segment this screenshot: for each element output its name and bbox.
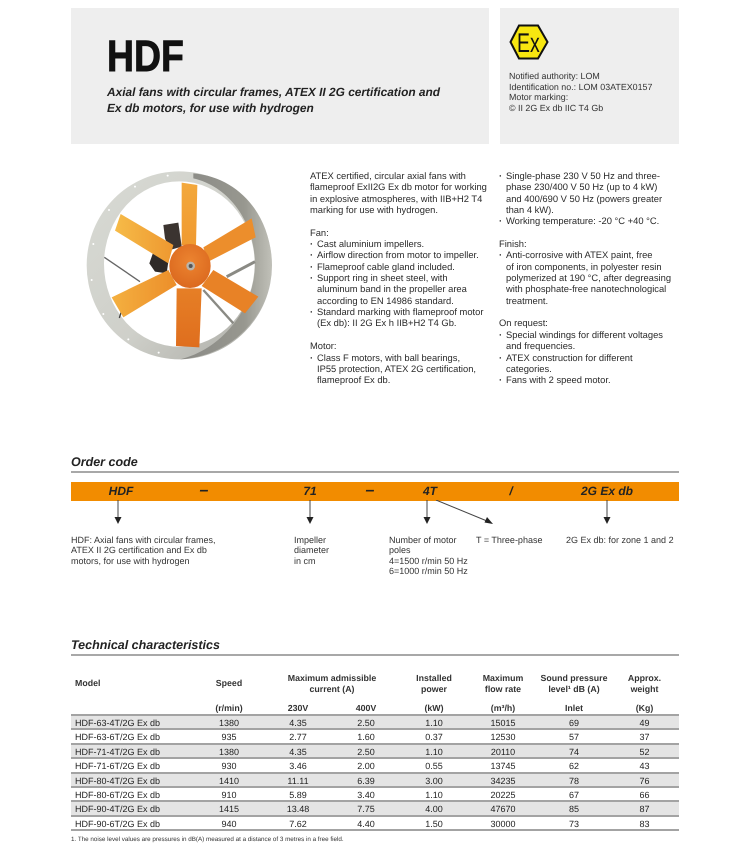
order code note: HDF — [71, 535, 216, 566]
technical characteristics table: 7.75 — [357, 804, 375, 814]
technical characteristics table: 30000 — [490, 819, 516, 829]
order code note: motor poles — [389, 535, 468, 576]
technical characteristics table: Model — [75, 678, 100, 688]
technical characteristics table: Approx. — [628, 673, 661, 683]
heading: Order code: Order code — [71, 455, 138, 469]
technical characteristics table: 4.00 — [425, 804, 443, 814]
description column 1: (Ex db): II 2G Ex h IIB+H2 T4 Gb. — [317, 318, 456, 328]
technical characteristics table: 1.10 — [425, 747, 443, 757]
technical characteristics table — [71, 673, 679, 831]
heading: Technical characteristics: Technical characteristics — [71, 638, 220, 652]
description column 2: Fans with 2 speed motor. — [506, 375, 611, 385]
technical characteristics table: 5.89 — [289, 790, 307, 800]
order code note: HDF: motors, for use with hydrogen — [71, 556, 190, 566]
motor and struts — [104, 223, 255, 323]
subtitle — [106, 85, 440, 114]
description column 1: flameproof Ex db. — [317, 375, 390, 385]
technical characteristics table: 47670 — [490, 804, 516, 814]
technical characteristics table: 85 — [569, 804, 579, 814]
description column 1: in explosive atmospheres, with IIB+H2 T4 — [310, 194, 482, 204]
order code note: HDF: ATEX II 2G certification and Ex db — [71, 545, 207, 555]
technical characteristics table: (r/min) — [215, 702, 243, 712]
technical characteristics table: 49 — [639, 718, 650, 728]
description column 1: IP55 protection, ATEX 2G certification, — [317, 364, 476, 374]
description column 1: Flameproof cable gland included. — [317, 262, 455, 272]
technical characteristics table: 15015 — [490, 718, 516, 728]
technical characteristics table: 2.50 — [357, 747, 375, 757]
description column 2: categories. — [506, 364, 552, 374]
description column 1: Fan: — [310, 228, 329, 238]
technical characteristics table: 0.55 — [425, 761, 443, 771]
technical characteristics table: 3.40 — [357, 790, 375, 800]
description column 1: Standard marking with flameproof motor — [317, 307, 483, 317]
technical characteristics table: 400V — [356, 702, 376, 712]
product photo: axial fan — [86, 171, 272, 360]
code segment: dash: – — [200, 482, 208, 499]
order code note: motor poles: poles — [389, 545, 411, 555]
technical characteristics table: 3.46 — [289, 761, 307, 771]
technical characteristics table: 3.00 — [425, 776, 443, 786]
certification text: Notified authority: LOM — [509, 71, 600, 81]
technical characteristics table: 52 — [639, 747, 650, 757]
technical characteristics table: 910 — [221, 790, 237, 800]
technical characteristics table: 1380 — [219, 718, 239, 728]
description column 2: polymerized at 190 °C, after degreasing — [506, 273, 671, 283]
order code note: motor poles: 4=1500 r/min 50 Hz — [389, 556, 468, 566]
description column 1: aluminum band in the propeller area — [317, 284, 467, 294]
technical characteristics table: 69 — [569, 718, 579, 728]
technical characteristics table: 76 — [639, 776, 650, 786]
technical characteristics table: 13.48 — [287, 804, 309, 814]
technical characteristics table: 4.40 — [357, 819, 375, 829]
description column 2: with phosphate-free nanotechnological — [506, 284, 666, 294]
technical characteristics table: 1.10 — [425, 790, 443, 800]
description column 1: flameproof ExII2G Ex db motor for working — [310, 182, 487, 192]
technical characteristics table: 13745 — [490, 761, 516, 771]
order code note: three-phase: T = Three-phase — [476, 535, 542, 545]
description column 1: Support ring in sheet steel, with — [317, 273, 448, 283]
technical characteristics table: Sound pressure — [540, 673, 607, 683]
code segment: slash: / — [509, 484, 513, 498]
header panel: title — [71, 8, 489, 144]
subtitle: Axial fans with circular frames, ATEX II 2G certification and — [107, 85, 440, 99]
technical characteristics table: 1415 — [219, 804, 239, 814]
technical characteristics table: Maximum — [483, 673, 523, 683]
certification text: Motor marking: — [509, 92, 568, 102]
icon: Ex hexagon: Ex — [517, 28, 540, 58]
order code note: motor poles: Number of motor — [389, 535, 457, 545]
description column 1: Motor: — [310, 341, 337, 351]
technical characteristics table: Speed — [216, 678, 242, 688]
technical characteristics table: 935 — [221, 732, 237, 742]
technical characteristics table: Maximum admissible — [288, 673, 376, 683]
fan ring — [87, 171, 272, 359]
technical characteristics table: 78 — [569, 776, 579, 786]
order code note: impeller: diameter — [294, 545, 329, 555]
technical characteristics table: 1.10 — [425, 718, 443, 728]
technical characteristics table: (m³/h) — [491, 702, 515, 712]
technical characteristics table: HDF-90-4T/2G Ex db — [75, 804, 160, 814]
technical characteristics table: Installed — [416, 673, 452, 683]
order code arrows — [114, 500, 610, 524]
technical characteristics table: 6.39 — [357, 776, 375, 786]
technical characteristics table: HDF-80-4T/2G Ex db — [75, 776, 160, 786]
technical characteristics table: 940 — [221, 819, 237, 829]
order code note: motor poles: 6=1000 r/min 50 Hz — [389, 566, 468, 576]
code segment: dash: – — [366, 482, 374, 499]
technical characteristics table: 67 — [569, 790, 579, 800]
technical characteristics table: flow rate — [485, 684, 521, 694]
description column 2: and frequencies. — [506, 341, 575, 351]
technical characteristics table: 4.35 — [289, 718, 307, 728]
technical characteristics table: 2.00 — [357, 761, 375, 771]
technical characteristics table: 1410 — [219, 776, 239, 786]
description column 1: Airflow direction from motor to impeller. — [317, 250, 479, 260]
technical characteristics table: 1.60 — [357, 732, 375, 742]
description column 1: according to EN 14986 standard. — [317, 296, 454, 306]
code segment: 71: 71 — [303, 484, 317, 498]
technical characteristics table: (kW) — [424, 702, 444, 712]
technical characteristics table: 73 — [569, 819, 579, 829]
header panel: certification — [500, 8, 679, 144]
technical characteristics table: power — [421, 684, 447, 694]
certification text — [509, 71, 652, 113]
technical characteristics table: 37 — [639, 732, 650, 742]
description column 2: Single-phase 230 V 50 Hz and three- — [506, 171, 660, 181]
technical characteristics table: weight — [631, 684, 658, 694]
title: HDF: HDF — [107, 32, 184, 81]
technical characteristics table: 57 — [569, 732, 579, 742]
technical characteristics table: 20110 — [491, 747, 515, 757]
description column 2: treatment. — [506, 296, 548, 306]
technical characteristics table: HDF-71-4T/2G Ex db — [75, 747, 160, 757]
impeller blades — [112, 183, 258, 347]
technical characteristics table: 74 — [569, 747, 579, 757]
description column 2: ATEX construction for different — [506, 352, 633, 362]
technical characteristics table: HDF-80-6T/2G Ex db — [75, 790, 160, 800]
description column 1 — [310, 171, 487, 385]
technical characteristics table: HDF-63-4T/2G Ex db — [75, 718, 160, 728]
technical characteristics table: 2.50 — [357, 718, 375, 728]
code segment: 4T: 4T — [423, 484, 437, 498]
description column 2: and 400/690 V 50 Hz (powers greater — [506, 194, 662, 204]
technical characteristics table: Inlet — [565, 702, 583, 712]
order code note: impeller — [294, 535, 329, 566]
technical characteristics table: 7.62 — [289, 819, 307, 829]
technical characteristics table: 62 — [569, 761, 579, 771]
description column 1: ATEX certified, circular axial fans with — [310, 171, 466, 181]
description column 2: of iron components, in polyester resin — [506, 262, 662, 272]
order code note: zone: 2G Ex db: for zone 1 and 2 — [566, 535, 674, 545]
technical characteristics table: HDF-90-6T/2G Ex db — [75, 819, 160, 829]
technical characteristics table: 11.11 — [287, 776, 309, 786]
technical characteristics table: 43 — [639, 761, 650, 771]
technical characteristics table: 34235 — [490, 776, 516, 786]
description column 1: marking for use with hydrogen. — [310, 205, 438, 215]
order code note: impeller: Impeller — [294, 535, 326, 545]
description column 2: On request: — [499, 318, 548, 328]
description column 2: Special windings for different voltages — [506, 330, 663, 340]
technical characteristics table: current (A) — [310, 684, 354, 694]
technical characteristics table: 20225 — [490, 790, 516, 800]
description column 2: Anti-corrosive with ATEX paint, free — [506, 250, 653, 260]
footnote: 1. The noise level values are pressures in dB(A) measured at a distance of 3 metres in a free field. — [71, 836, 344, 843]
technical characteristics table: 1.50 — [425, 819, 443, 829]
order code note: HDF: HDF: Axial fans with circular frames, — [71, 535, 216, 545]
certification text: © II 2G Ex db IIC T4 Gb — [509, 103, 603, 113]
code segment: HDF: HDF — [109, 484, 133, 498]
technical characteristics table: 12530 — [490, 732, 516, 742]
technical characteristics table: 66 — [639, 790, 650, 800]
code segment: 2G Ex db: 2G Ex db — [581, 484, 633, 498]
technical characteristics table: 1380 — [219, 747, 239, 757]
description column 2 — [499, 171, 671, 385]
description column 2: Working temperature: -20 °C +40 °C. — [506, 216, 659, 226]
technical characteristics table: 930 — [221, 761, 237, 771]
technical characteristics table: HDF-63-6T/2G Ex db — [75, 732, 160, 742]
description column 2: Finish: — [499, 239, 527, 249]
technical characteristics table: 87 — [639, 804, 650, 814]
order code bar — [71, 482, 679, 500]
order code note: impeller: in cm — [294, 556, 316, 566]
technical characteristics table: (Kg) — [636, 702, 653, 712]
description column 2: phase 230/400 V 50 Hz (up to 4 kW) — [506, 182, 657, 192]
technical characteristics table: level¹ dB (A) — [548, 684, 600, 694]
icon: Ex hexagon — [509, 24, 549, 60]
technical characteristics table: 0.37 — [425, 732, 443, 742]
certification text: Identification no.: LOM 03ATEX0157 — [509, 82, 652, 92]
description column 1: Cast aluminium impellers. — [317, 239, 424, 249]
description column 1: Class F motors, with ball bearings, — [317, 352, 460, 362]
technical characteristics table: 230V — [288, 702, 308, 712]
description column 2: than 4 kW). — [506, 205, 554, 215]
technical characteristics table: 4.35 — [289, 747, 307, 757]
technical characteristics table: HDF-71-6T/2G Ex db — [75, 761, 160, 771]
technical characteristics table: 2.77 — [289, 732, 307, 742]
subtitle: Ex db motors, for use with hydrogen — [107, 100, 314, 114]
technical characteristics table: 83 — [639, 819, 650, 829]
